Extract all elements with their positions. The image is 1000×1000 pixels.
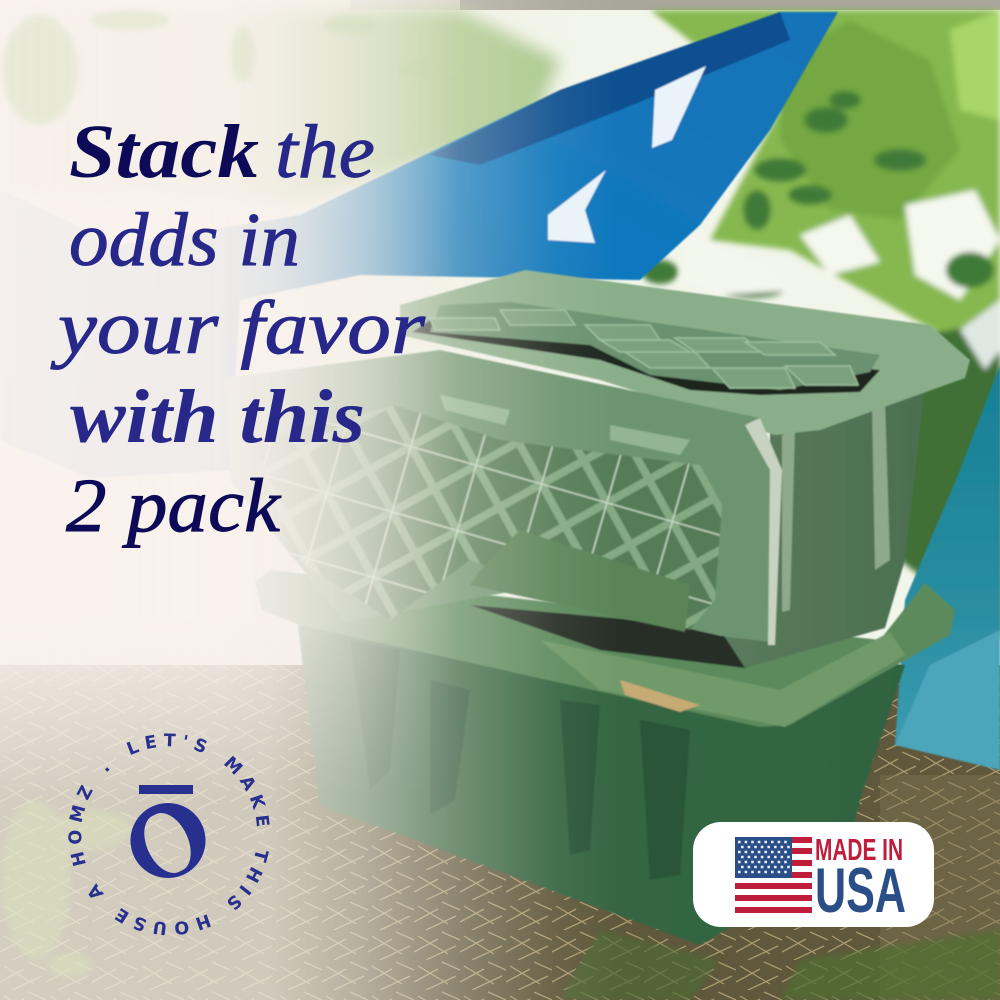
heading line 1: Stack: [69, 110, 259, 194]
heading line 1: the: [275, 110, 375, 194]
storage tote: upper: [225, 270, 970, 668]
storage tote: lower: [255, 570, 955, 945]
usa text: USA: [815, 856, 906, 926]
white fade overlay: [0, 0, 590, 1000]
ground: [0, 665, 1000, 1000]
made in USA badge: [693, 822, 934, 927]
flag: [735, 837, 812, 913]
made in text: MADE IN: [815, 832, 903, 867]
heading line 3: your favor: [50, 286, 425, 370]
heading line 5: 2 pack: [66, 464, 281, 548]
logo badge: LET'S MAKE THIS HOUSE A HOMZ .: [68, 733, 270, 936]
heading line 4: with this: [70, 375, 365, 459]
teal tarp: [895, 365, 1000, 770]
heading line 2: odds in: [69, 198, 300, 282]
blue hammock: [0, 12, 838, 478]
heading: [50, 110, 425, 548]
heading line 1: [69, 110, 375, 194]
